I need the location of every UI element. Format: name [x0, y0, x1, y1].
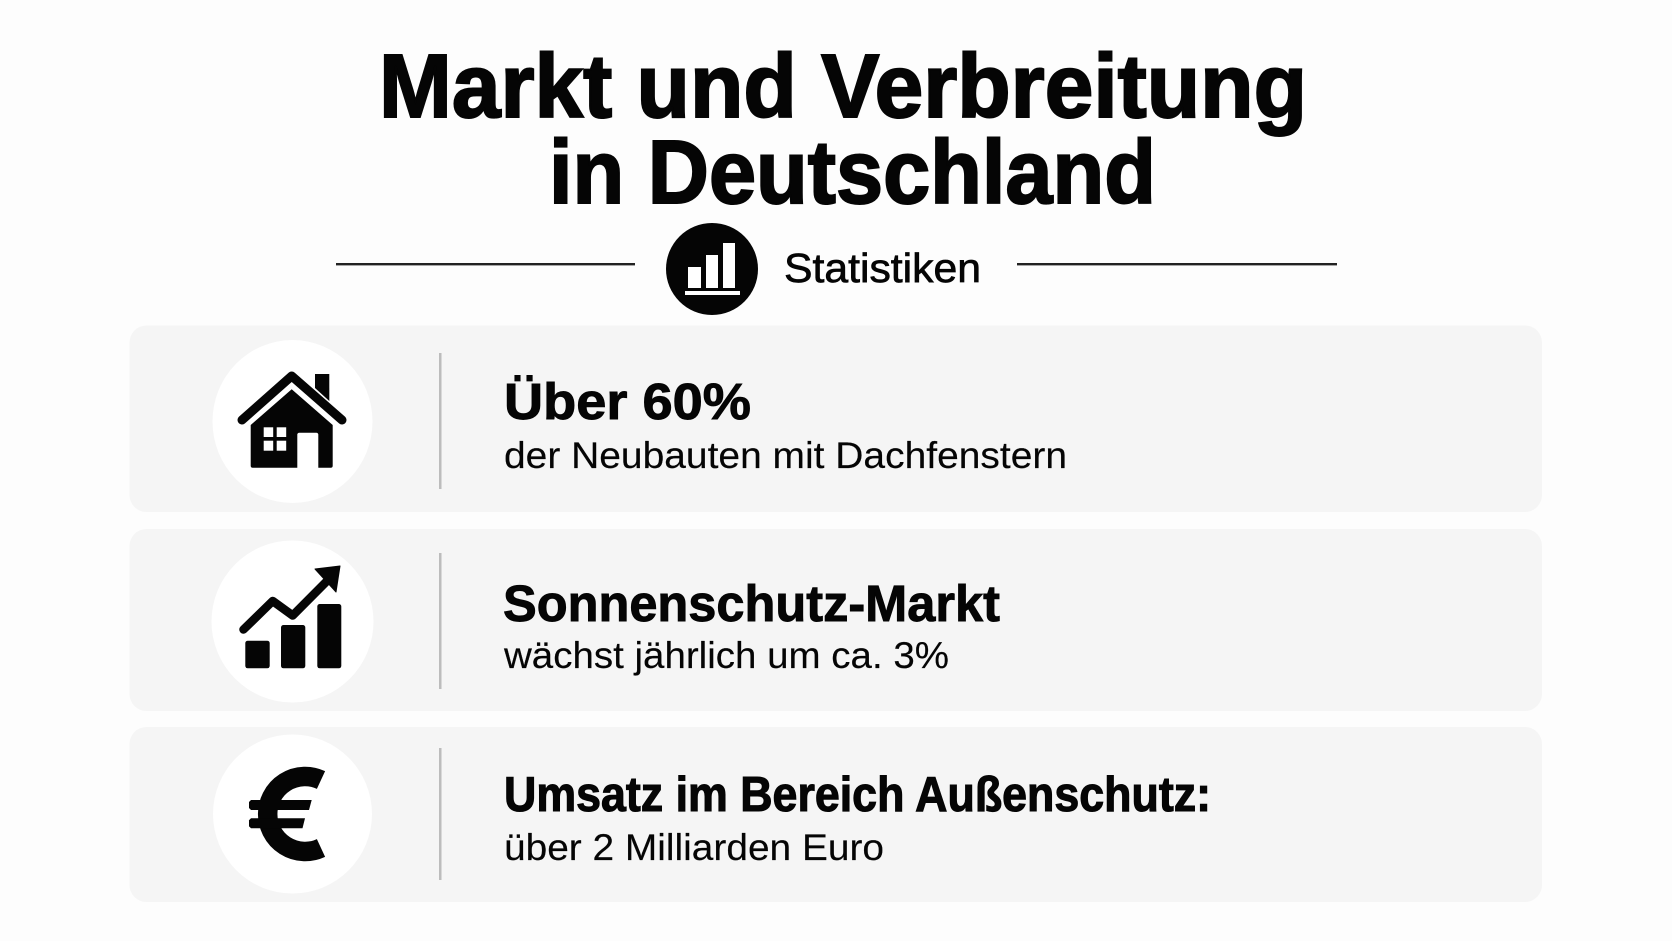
panel: new buildings [130, 326, 1542, 512]
panel: sun protection market [130, 529, 1542, 711]
stat text: über 2 Milliarden Euro [504, 827, 884, 868]
title: in Deutschland [549, 123, 1156, 223]
icon: bar chart badge [666, 223, 758, 315]
section divider: statistics [336, 223, 1337, 315]
stat text: wächst jährlich um ca. 3% [503, 635, 949, 676]
stat text [504, 768, 1211, 868]
stat text: Über 60% [504, 373, 751, 430]
icon: house [212, 340, 372, 503]
panel: revenue [130, 727, 1542, 902]
icon: growth chart [212, 540, 374, 702]
stat text: Sonnenschutz-Markt [503, 575, 1000, 632]
stat text: der Neubauten mit Dachfenstern [504, 435, 1067, 476]
section label: Statistiken [784, 245, 981, 291]
stat text [504, 373, 1067, 476]
title [379, 37, 1307, 223]
title: Markt und Verbreitung [379, 37, 1307, 137]
icon: euro [213, 734, 372, 894]
stat text: Umsatz im Bereich Außenschutz: [504, 768, 1211, 822]
stat text [503, 575, 1000, 676]
